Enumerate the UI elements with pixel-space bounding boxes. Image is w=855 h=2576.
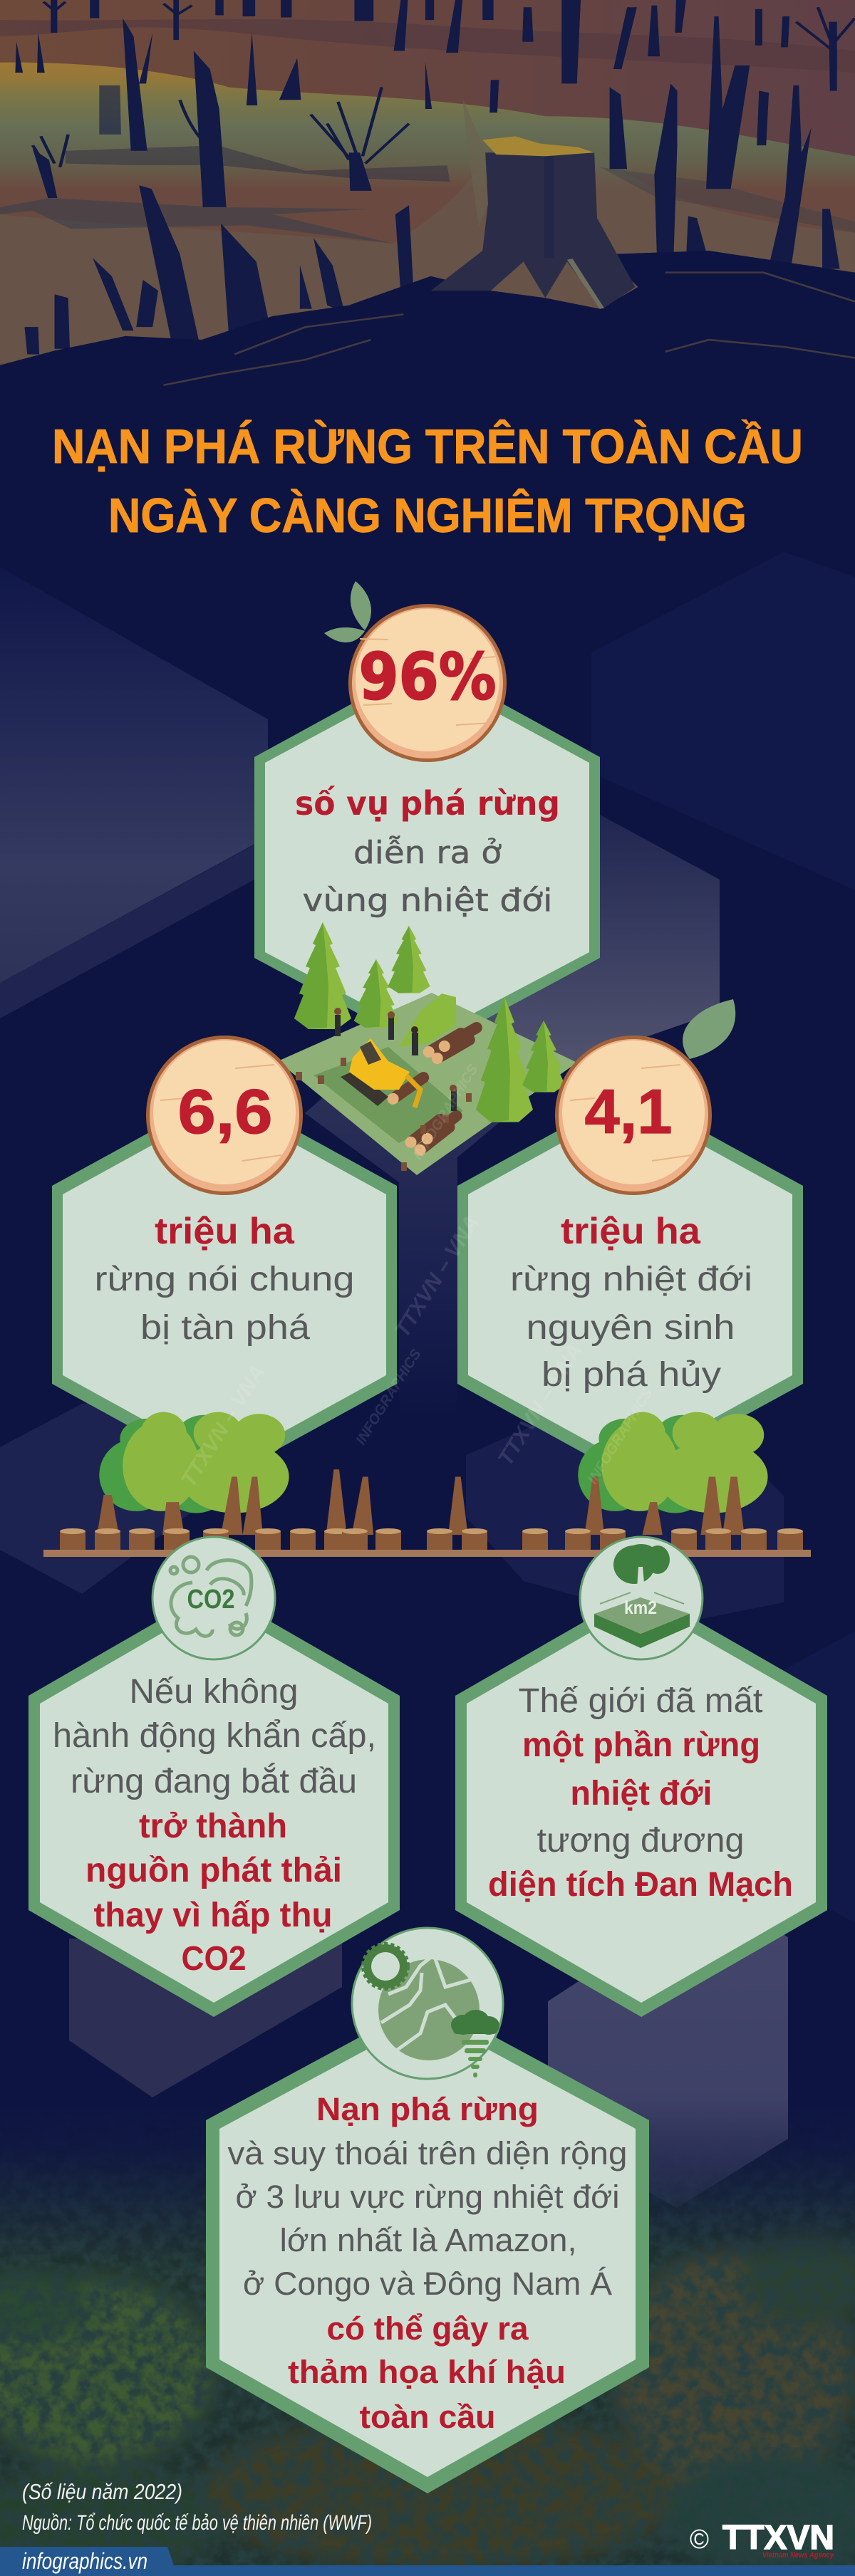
number 96%: 96% <box>359 640 496 714</box>
panel text: ở 3 lưu vực rừng nhiệt đới <box>235 2179 620 2215</box>
panel: global climate disaster <box>206 1928 649 2493</box>
icon: leaf <box>683 999 735 1059</box>
hexagon fill <box>219 2017 636 2477</box>
panel text <box>488 1682 793 1904</box>
panel text <box>295 784 560 919</box>
logo: TTXVN: © <box>690 2525 709 2555</box>
conifers <box>294 922 565 1122</box>
panel text: triệu ha <box>155 1211 295 1252</box>
photo: cleared rainforest background <box>0 2101 855 2576</box>
logo: TTXVN: Vietnam News Agency <box>762 2551 834 2560</box>
panel text: một phần rừng <box>522 1726 760 1764</box>
hexagon fill <box>468 1105 792 1464</box>
panel text: nguyên sinh <box>526 1309 735 1347</box>
panel text: Nếu không <box>130 1673 298 1711</box>
icon: tree on km2 plot: km2 <box>624 1597 657 1618</box>
title <box>52 419 803 543</box>
source note: Nguồn: Tổ chức quốc tế bảo vệ thiên nhiên (WWF) <box>22 2511 372 2535</box>
panel text: và suy thoái trên diện rộng <box>228 2135 627 2171</box>
panel text: toàn cầu <box>359 2399 496 2435</box>
panel text <box>228 2091 627 2435</box>
hexagon frame <box>254 662 600 1050</box>
panel text: nguồn phát thải <box>86 1852 342 1889</box>
title: NGÀY CÀNG NGHIÊM TRỌNG <box>108 488 747 543</box>
hexagon fill <box>63 1105 386 1464</box>
panel text: thay vì hấp thụ <box>94 1897 332 1934</box>
website: infographics.vn <box>22 2548 147 2574</box>
watermark: INFOGRAPHICS <box>585 1385 656 1487</box>
illustration: isometric logging scene <box>278 922 577 1175</box>
hexagon frame <box>28 1589 400 2017</box>
panel text: rừng nhiệt đới <box>510 1261 752 1298</box>
wood slice <box>348 604 507 762</box>
panel text <box>94 1211 355 1347</box>
data year note: (Số liệu năm 2022) <box>22 2479 182 2504</box>
panel text: rừng nói chung <box>94 1261 355 1298</box>
right tree cluster <box>578 1412 768 1513</box>
panel text: trở thành <box>139 1808 287 1845</box>
icon: globe with sun and tornado <box>352 1928 503 2079</box>
panel text: diện tích Đan Mạch <box>488 1866 793 1904</box>
ground <box>278 993 577 1175</box>
panel text: diễn ra ở <box>353 835 502 871</box>
watermark: INFOGRAPHICS <box>410 1061 482 1163</box>
number 6,6: 6,6 <box>178 1076 272 1147</box>
hexagon frame <box>52 1091 397 1479</box>
log piles <box>385 1020 484 1158</box>
panel text <box>510 1211 752 1394</box>
panel text: Nạn phá rừng <box>316 2091 539 2127</box>
panel: forests becoming emission source <box>28 1537 400 2017</box>
icon: CO2 cloud: CO2 <box>187 1585 235 1615</box>
stumps <box>60 1528 803 1550</box>
footer bar <box>0 2547 855 2576</box>
panel text: ở Congo và Đông Nam Á <box>243 2265 612 2302</box>
wood slice <box>146 1036 303 1195</box>
panel text: rừng đang bắt đầu <box>71 1762 357 1800</box>
hexagon frame <box>206 2001 649 2493</box>
bulldozer <box>341 1038 420 1107</box>
left tree cluster <box>99 1412 289 1513</box>
panel text: số vụ phá rừng <box>295 784 560 823</box>
trunks <box>97 1469 745 1535</box>
hexagon fill <box>40 1603 388 2003</box>
panel text: bị phá hủy <box>542 1356 721 1394</box>
panel text: hành động khẩn cấp, <box>53 1717 376 1755</box>
title: NẠN PHÁ RỪNG TRÊN TOÀN CẦU <box>52 419 803 474</box>
panel text: CO2 <box>181 1940 247 1978</box>
watermark: TTXVN – VNA <box>494 1340 587 1470</box>
background hexagon pattern <box>0 552 855 1923</box>
panel text: Thế giới đã mất <box>519 1682 762 1720</box>
watermark <box>177 1061 656 1491</box>
panel: 96% of deforestation in the tropics <box>254 581 600 1050</box>
icon: tree on km2 plot <box>580 1537 703 1659</box>
hexagon fill <box>467 1603 816 2003</box>
panel text: tương đương <box>537 1822 744 1860</box>
wood slice <box>555 1036 712 1195</box>
panel: 4.1 million ha of primary tropical forest destroyed <box>457 999 803 1479</box>
watermark: INFOGRAPHICS <box>353 1346 425 1448</box>
logo: TTXVN: TTXVN <box>722 2519 834 2557</box>
panel text: vùng nhiệt đới <box>302 882 553 919</box>
watermark: TTXVN – VNA <box>390 1211 484 1342</box>
panel text: lớn nhất là Amazon, <box>279 2222 577 2258</box>
panel: tropical forest lost equal to Denmark <box>455 1537 827 2017</box>
workers <box>334 1008 457 1111</box>
panel text: có thể gây ra <box>326 2310 529 2347</box>
hexagon frame <box>455 1589 827 2017</box>
watermark: TTXVN – VNA <box>177 1361 270 1491</box>
panel text <box>53 1673 376 1978</box>
fallen tree <box>399 994 456 1047</box>
hexagon frame <box>457 1091 803 1479</box>
number 4,1: 4,1 <box>584 1076 673 1147</box>
illustration: trees, dead trunks and stumps <box>43 1412 811 1557</box>
panel: 6.6 million ha of forest destroyed <box>52 1036 397 1479</box>
panel text: nhiệt đới <box>570 1775 712 1813</box>
panel text: thảm họa khí hậu <box>288 2354 566 2390</box>
ground bar <box>43 1550 811 1557</box>
illustration: burned forest header <box>0 0 855 396</box>
panel text: bị tàn phá <box>140 1309 310 1347</box>
hexagon fill <box>265 675 589 1038</box>
icon: leaves <box>324 581 371 642</box>
icon: CO2 cloud <box>152 1537 275 1659</box>
tree stumps <box>296 1058 472 1171</box>
background hexagons over photo <box>69 1893 788 2208</box>
panel text: triệu ha <box>561 1211 701 1252</box>
